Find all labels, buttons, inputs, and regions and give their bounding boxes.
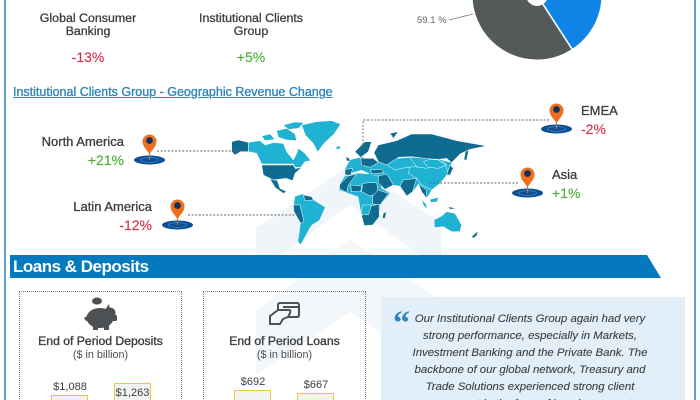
bar 2 with value: $1,263 — [116, 387, 149, 399]
bar 1 — [51, 395, 88, 400]
donut chart — [448, 0, 602, 60]
donut percentage label: 59.1 % — [417, 15, 447, 26]
region name: North America — [42, 134, 124, 149]
panel title: End of Period Loans — [229, 334, 340, 348]
right frame line — [694, 0, 696, 400]
value 1: $692 — [241, 376, 265, 388]
region change: -12% — [119, 217, 152, 233]
icon: map pin — [162, 200, 193, 230]
region name: Latin America — [73, 199, 152, 214]
quote text: backbone of our global network, Treasury and — [415, 364, 645, 376]
marker: north america — [42, 134, 165, 168]
region change: -2% — [581, 121, 606, 137]
region name: Asia — [552, 167, 577, 182]
icon: map pin — [512, 168, 543, 198]
bar 1 — [234, 390, 271, 400]
section banner: loans and deposits — [10, 255, 661, 278]
bar 2 — [297, 393, 334, 400]
panel subtitle: ($ in billion) — [73, 349, 128, 361]
icon: hand holding card — [269, 302, 300, 325]
section heading: geographic revenue change: Institutional Clients Group - Geographic Revenue Change — [13, 85, 333, 99]
segment label: Banking — [66, 24, 110, 38]
dark regions — [232, 140, 248, 155]
segment: institutional clients group — [199, 11, 303, 65]
panel title: End of Period Deposits — [38, 334, 163, 348]
segment label — [199, 11, 303, 38]
light regions — [248, 141, 311, 167]
segment change value: +5% — [237, 49, 265, 65]
segment label — [40, 11, 136, 38]
segment label: Global Consumer — [40, 11, 136, 25]
region change: +21% — [88, 152, 124, 168]
quote text: Investment Banking and the Private Bank. The — [413, 347, 647, 359]
icon: map pin — [134, 134, 165, 164]
banner title: Loans & Deposits — [13, 257, 149, 276]
region change: +1% — [552, 185, 580, 201]
bar 2 with value — [114, 383, 151, 400]
value 2: $667 — [304, 379, 328, 391]
panel subtitle: ($ in billion) — [257, 349, 312, 361]
icon: piggy bank — [84, 298, 117, 330]
quote panel — [381, 297, 685, 400]
panel: deposits — [19, 291, 182, 400]
value 1: $1,088 — [53, 381, 87, 393]
panel: loans — [203, 291, 366, 400]
quote text: Our Institutional Clients Group again had very — [415, 313, 645, 325]
left frame line — [4, 0, 6, 400]
icon: map pin — [541, 104, 572, 134]
quote text: Trade Solutions experienced strong client — [426, 381, 634, 393]
marker: latin america — [73, 199, 193, 233]
marker: emea — [541, 103, 618, 137]
segment: global consumer banking — [40, 11, 136, 65]
region name: EMEA — [581, 103, 618, 118]
segment change value: -13% — [72, 49, 104, 65]
segment label: Group — [234, 24, 268, 38]
quote text — [412, 313, 648, 400]
land base — [293, 157, 452, 244]
marker: asia — [512, 167, 580, 201]
segment label: Institutional Clients — [199, 11, 303, 25]
icon: quotation mark: “ — [393, 305, 410, 342]
quote text: strong performance, especially in Markets, — [423, 330, 637, 342]
